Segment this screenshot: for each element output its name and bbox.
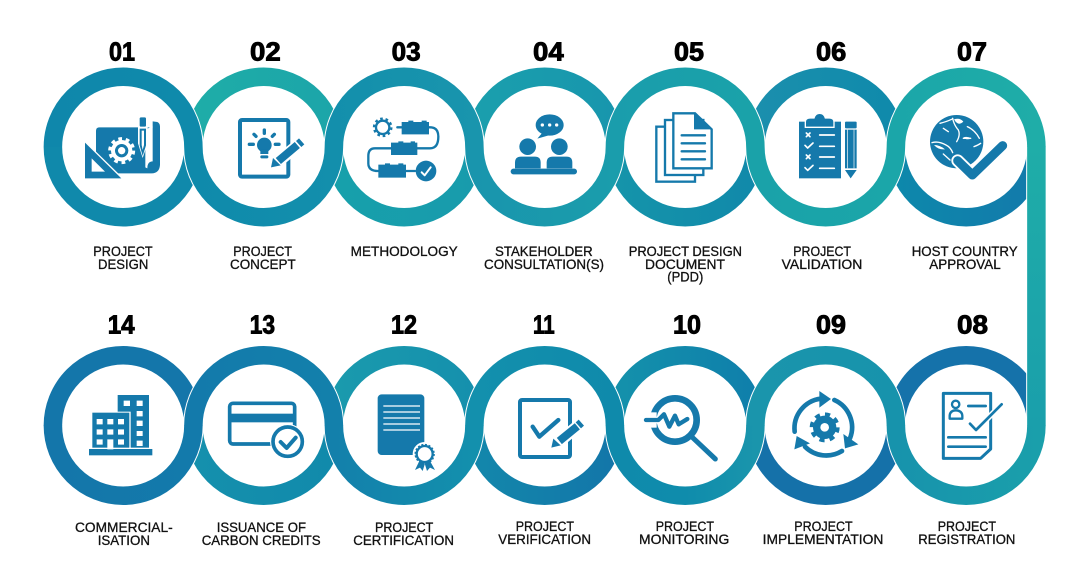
ribbon back segments bbox=[53, 77, 1036, 496]
label: project validation: VALIDATION bbox=[782, 257, 862, 272]
icon: clipboard checklist and pencil bbox=[799, 113, 857, 178]
icon: magnifier with pulse line bbox=[646, 398, 715, 459]
icon: certificate with rosette bbox=[378, 394, 437, 471]
label: project certification bbox=[353, 520, 454, 548]
label: project monitoring: PROJECT bbox=[656, 519, 714, 534]
label: stakeholder consultations bbox=[484, 244, 604, 272]
step number 11: 11 bbox=[533, 309, 555, 339]
label: project concept: PROJECT bbox=[233, 244, 292, 259]
icon: office buildings bbox=[89, 395, 152, 455]
label: commercialisation bbox=[75, 520, 173, 548]
label: project implementation: PROJECT bbox=[794, 519, 853, 534]
step number 13: 13 bbox=[250, 309, 275, 339]
step number 05: 05 bbox=[674, 37, 704, 67]
label: host country approval: APPROVAL bbox=[929, 257, 1001, 272]
label: project monitoring: MONITORING bbox=[639, 532, 729, 547]
label: project implementation bbox=[763, 519, 883, 547]
label: project verification: VERIFICATION bbox=[498, 532, 591, 547]
icon: registration form with check bbox=[943, 393, 1002, 458]
label: project registration bbox=[918, 519, 1015, 547]
icon: methodology flow with gear, blocks and check bbox=[368, 119, 438, 181]
step number 04: 04 bbox=[533, 37, 564, 67]
step number 02: 02 bbox=[250, 37, 281, 67]
label: project certification: CERTIFICATION bbox=[353, 533, 454, 548]
step number 03: 03 bbox=[392, 37, 421, 67]
label: project validation: PROJECT bbox=[793, 244, 851, 259]
label: methodology: METHODOLOGY bbox=[351, 244, 458, 259]
label: commercialisation: COMMERCIAL- bbox=[75, 520, 173, 535]
label: project concept bbox=[230, 244, 296, 272]
label: project design: DESIGN bbox=[98, 257, 148, 272]
label: project verification bbox=[498, 519, 591, 547]
icon: stacked documents bbox=[656, 113, 712, 182]
step number 08: 08 bbox=[957, 309, 988, 339]
step number 10: 10 bbox=[673, 309, 701, 339]
label: project design bbox=[93, 244, 153, 272]
label: project design document: DOCUMENT bbox=[645, 257, 725, 272]
label: host country approval: HOST COUNTRY bbox=[912, 244, 1018, 259]
step number 12: 12 bbox=[391, 309, 417, 339]
ribbon: woven circle chain bbox=[53, 77, 1036, 496]
step number 09: 09 bbox=[816, 309, 846, 339]
label: project implementation: IMPLEMENTATION bbox=[763, 532, 883, 547]
label: commercialisation: ISATION bbox=[98, 533, 150, 548]
label: project concept: CONCEPT bbox=[230, 257, 296, 272]
icon: gear in cycle arrows bbox=[794, 391, 858, 455]
step number 06: 06 bbox=[816, 37, 846, 67]
label: host country approval bbox=[912, 244, 1018, 272]
icon: globe with check mark bbox=[930, 115, 1003, 175]
label: project monitoring bbox=[639, 519, 729, 547]
label: project verification: PROJECT bbox=[516, 519, 574, 534]
icon: checked document with pencil bbox=[520, 400, 585, 457]
step number 01: 01 bbox=[109, 37, 135, 67]
icon: document with light bulb and pencil bbox=[240, 120, 303, 177]
label: issuance of carbon credits: ISSUANCE OF bbox=[217, 520, 306, 535]
ribbon front segments bbox=[53, 77, 1036, 496]
label: stakeholder consultations: CONSULTATION(S) bbox=[484, 257, 604, 272]
label: issuance of carbon credits bbox=[202, 520, 321, 548]
label: stakeholder consultations: STAKEHOLDER bbox=[495, 244, 593, 259]
label: project validation bbox=[782, 244, 862, 272]
label: issuance of carbon credits: CARBON CREDITS bbox=[202, 533, 321, 548]
ribbon white casing bbox=[53, 77, 1036, 496]
label: project certification: PROJECT bbox=[375, 520, 433, 535]
icon: two people talking with speech bubble bbox=[511, 114, 577, 174]
icon: credit card with check badge bbox=[229, 403, 305, 459]
label: project design document: (PDD) bbox=[667, 270, 703, 285]
step number 07: 07 bbox=[957, 37, 987, 67]
label: project design: PROJECT bbox=[93, 244, 153, 259]
label: project registration: PROJECT bbox=[938, 519, 996, 534]
icon: blueprint with set square, gear and pencil bbox=[85, 115, 160, 178]
label: project registration: REGISTRATION bbox=[918, 532, 1015, 547]
step number 14: 14 bbox=[108, 309, 135, 339]
label: project design document: PROJECT DESIGN bbox=[629, 244, 742, 259]
label: project design document bbox=[629, 244, 742, 285]
